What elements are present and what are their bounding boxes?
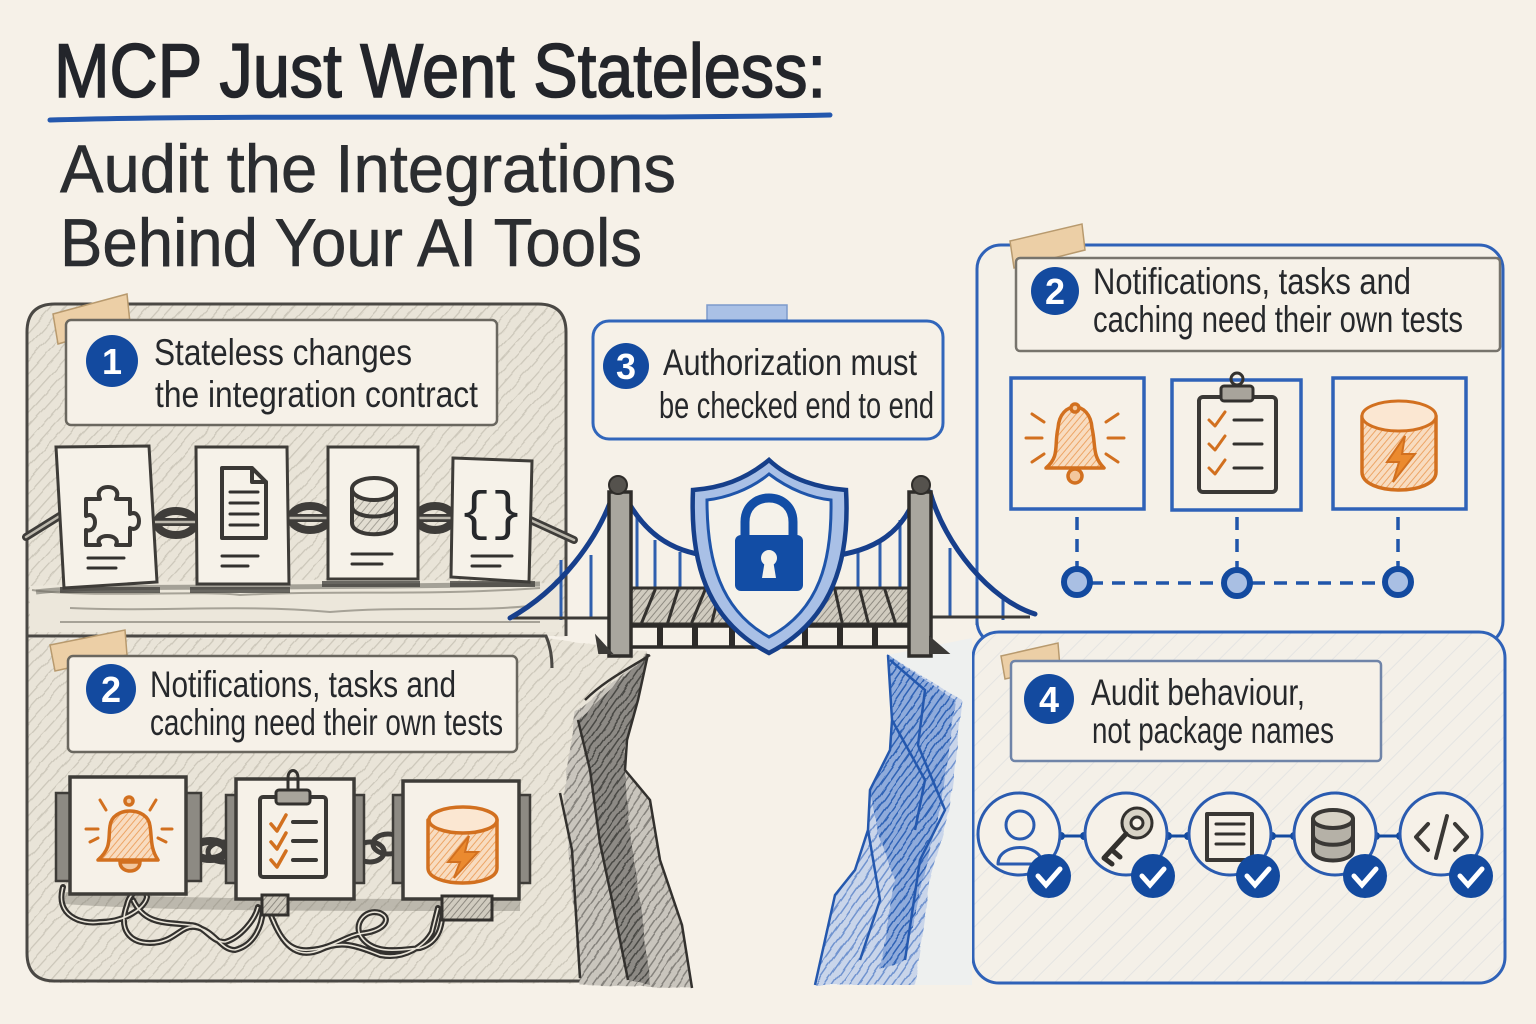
card: cache xyxy=(393,781,530,899)
label 1: Stateless changes xyxy=(154,332,412,373)
beam xyxy=(625,626,915,647)
tape 2 right xyxy=(1010,224,1085,268)
card: checklist xyxy=(1172,373,1301,510)
card: checklist xyxy=(226,770,364,899)
title: MCP Just Went Stateless: xyxy=(54,29,826,114)
label 4: 4 xyxy=(1039,679,1059,720)
cables xyxy=(510,492,1035,618)
tape 1 xyxy=(53,294,130,344)
card: puzzle xyxy=(56,446,157,588)
card: bell xyxy=(1011,378,1144,509)
check badges xyxy=(1027,854,1493,898)
label 2 right: Notifications, tasks and xyxy=(1093,261,1411,302)
label 3: 3 xyxy=(616,346,636,387)
panel: left top xyxy=(27,304,566,636)
shadow xyxy=(65,898,520,905)
side rails xyxy=(510,617,1030,618)
label 2 right xyxy=(1016,258,1500,351)
shelf shadow xyxy=(60,584,535,590)
dashed connectors xyxy=(1077,517,1398,583)
panel: left bottom with cliff xyxy=(27,636,692,988)
deck xyxy=(620,588,925,624)
label 1 xyxy=(66,320,497,425)
cables xyxy=(61,887,443,956)
label 2 left: Notifications, tasks and xyxy=(150,664,456,705)
tape 2 left xyxy=(50,630,127,671)
hangers xyxy=(561,515,1003,625)
card: braces xyxy=(451,458,532,582)
icon: key xyxy=(1085,793,1167,875)
audit icons row xyxy=(978,793,1493,898)
label 4 xyxy=(1011,661,1381,761)
icon: database xyxy=(1294,793,1376,875)
label 2 right: 2 xyxy=(1045,271,1065,312)
label 3: be checked end to end xyxy=(659,385,934,426)
towers xyxy=(609,492,631,656)
card: document xyxy=(196,447,289,584)
card: database xyxy=(328,447,418,579)
icon: code xyxy=(1400,793,1482,875)
shelf xyxy=(30,580,562,632)
card: bell xyxy=(56,777,201,894)
chained icon cards: bottom left xyxy=(56,770,530,956)
label 1: 1 xyxy=(102,341,122,382)
panel: right bottom xyxy=(973,632,1505,983)
card: braces: {} xyxy=(459,485,523,546)
title xyxy=(50,29,830,281)
short chains xyxy=(194,841,226,859)
label 3 xyxy=(593,321,943,439)
card: cache xyxy=(1333,378,1466,509)
tape 4 xyxy=(1001,643,1060,679)
tape 3 xyxy=(707,305,787,333)
label 2 left xyxy=(68,656,517,752)
icon: shield with padlock xyxy=(693,460,847,653)
clasps xyxy=(262,895,492,920)
label 1: the integration contract xyxy=(155,374,479,415)
label 4: Audit behaviour, xyxy=(1091,672,1305,713)
label 4: not package names xyxy=(1092,710,1334,751)
title: Behind Your AI Tools xyxy=(60,205,642,281)
panel: right top xyxy=(977,245,1503,645)
icon: document xyxy=(1189,793,1271,875)
chain of cards: top left xyxy=(26,446,574,590)
cliff: left rock xyxy=(560,654,692,988)
label 3: Authorization must xyxy=(663,342,918,383)
label 2 left: caching need their own tests xyxy=(150,702,503,743)
icon: user xyxy=(978,793,1060,875)
title: Audit the Integrations xyxy=(60,131,676,207)
label 2 left: 2 xyxy=(101,669,121,710)
icon cards with dashed connectors xyxy=(1011,373,1466,596)
bridge xyxy=(510,476,1035,656)
chain links xyxy=(26,506,574,540)
cliff: right rock xyxy=(815,638,972,985)
